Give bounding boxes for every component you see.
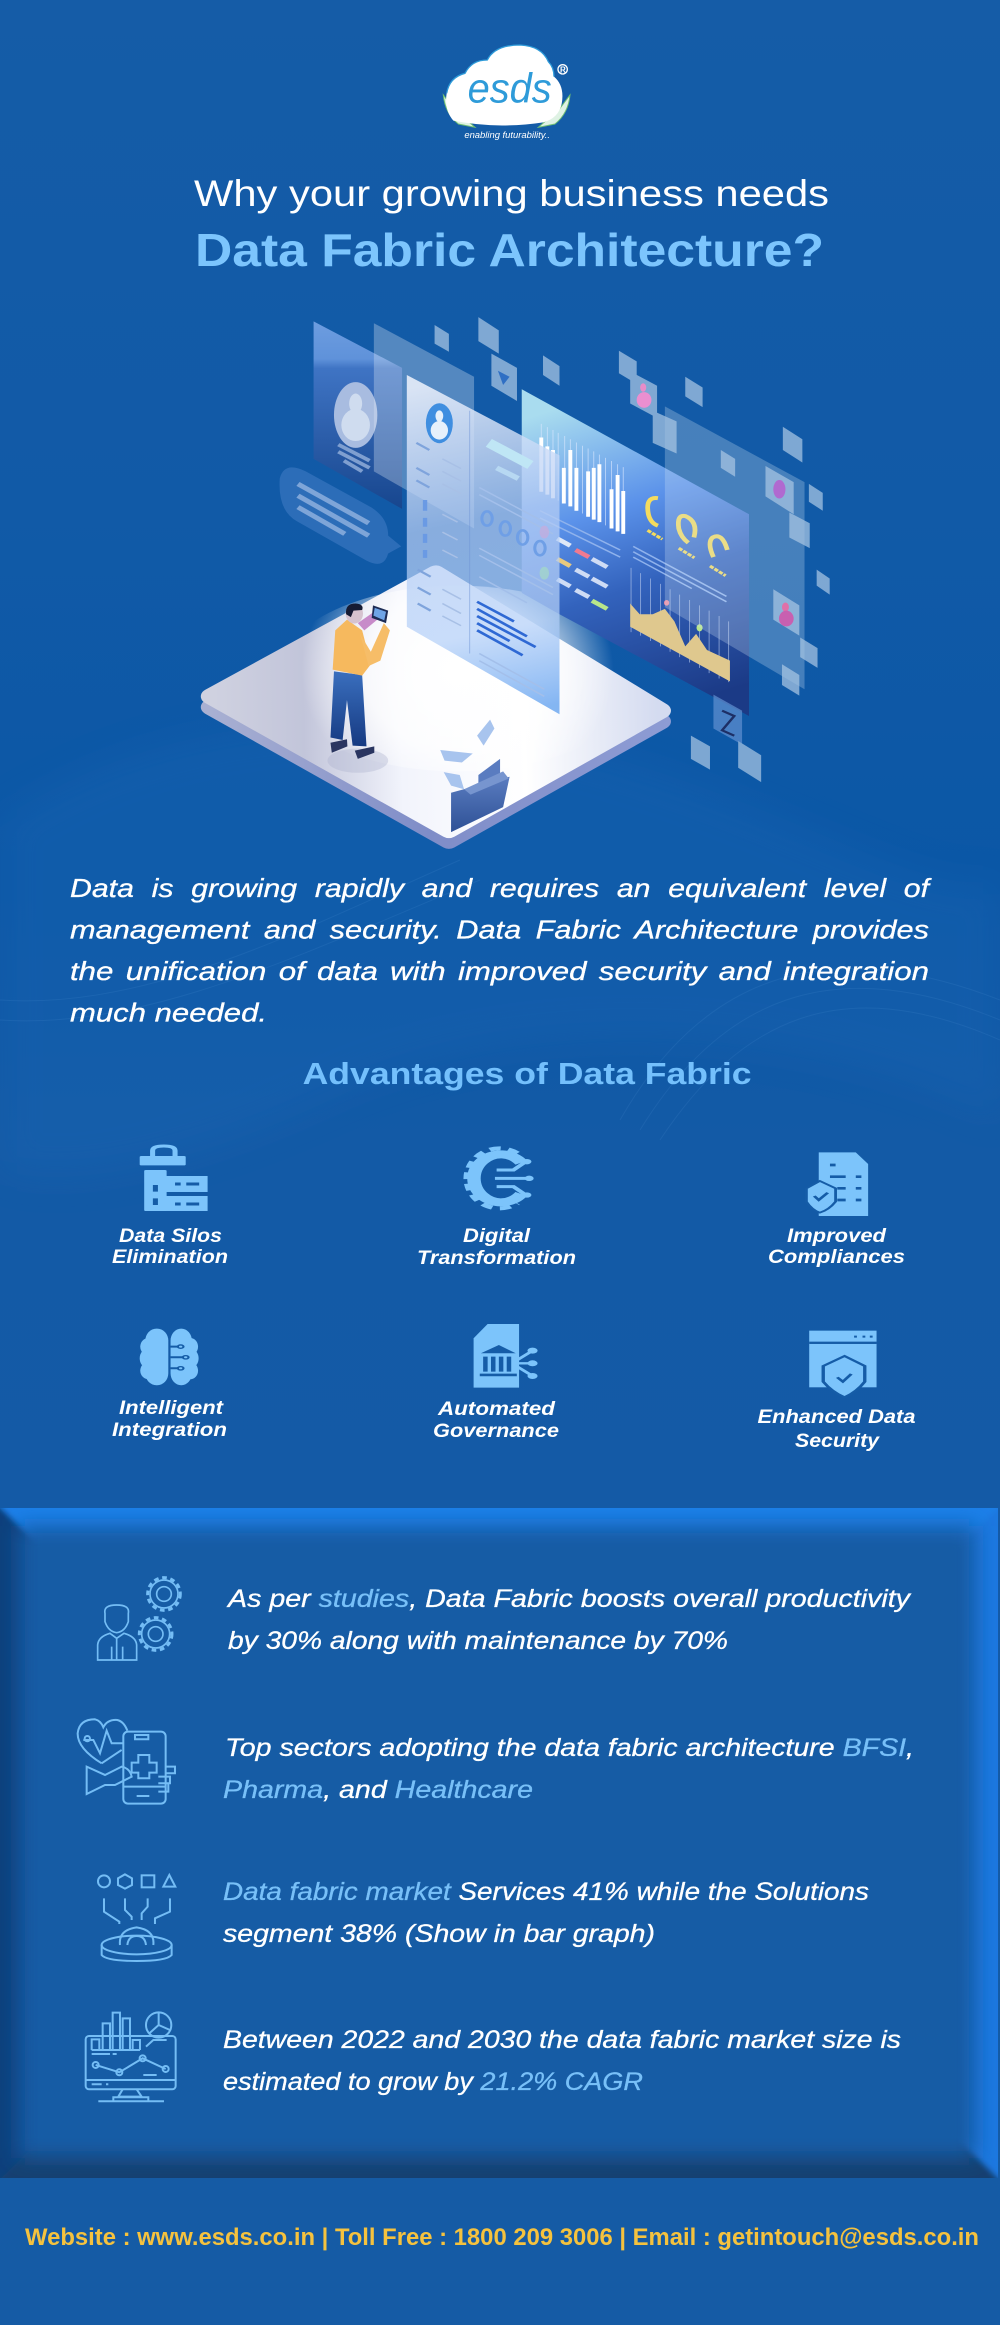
title xyxy=(194,173,829,276)
advantage labels: Governance xyxy=(433,1420,559,1442)
text: by 30% along with maintenance by 70% xyxy=(228,1627,728,1655)
advantage labels: Integration xyxy=(112,1419,227,1441)
text: Between 2022 and 2030 the data fabric market size is xyxy=(223,2026,901,2054)
intro paragraph: much needed. xyxy=(70,998,267,1028)
illustration: isometric data dashboard xyxy=(210,317,830,841)
icon: automated governance xyxy=(474,1324,538,1388)
list panel xyxy=(407,375,559,714)
text xyxy=(223,1734,914,1804)
icon: shapes and gear platform xyxy=(98,1874,175,1961)
advantage labels: Digital xyxy=(463,1225,531,1247)
translucent panel behind list xyxy=(374,323,474,529)
translucent right panel xyxy=(665,406,805,689)
text xyxy=(223,1878,869,1948)
text: Top sectors adopting the data fabric architecture BFSI , xyxy=(225,1734,914,1762)
area chart xyxy=(630,568,730,682)
floating squares xyxy=(435,317,830,782)
intro paragraph: the unification of data with improved security and integration xyxy=(70,956,929,986)
advantage labels: Compliances xyxy=(768,1246,905,1268)
status pills and text lines xyxy=(540,511,726,609)
icon: data silos xyxy=(140,1146,208,1211)
icon: digital transformation xyxy=(467,1148,534,1208)
logo: esds cloud: R xyxy=(560,65,566,74)
text: segment 38% (Show in bar graph) xyxy=(223,1920,655,1948)
intro paragraph: management and security. Data Fabric Architecture provides xyxy=(70,914,929,944)
intro paragraph: Data is growing rapidly and requires an equivalent level of xyxy=(70,873,932,903)
folder and flying papers xyxy=(440,720,510,832)
chat bubble xyxy=(280,467,401,564)
advantage labels xyxy=(112,1225,916,1452)
profile panel xyxy=(314,321,402,509)
logo: esds cloud: esds xyxy=(468,66,552,112)
text xyxy=(226,1585,912,1655)
stat 4: growth xyxy=(86,2012,901,2101)
advantage icons xyxy=(140,1146,877,1397)
advantage labels: Data Silos xyxy=(119,1225,222,1247)
logo: esds cloud xyxy=(443,45,570,140)
icon: person with gears xyxy=(98,1578,180,1660)
text xyxy=(223,2026,901,2096)
advantage labels: Intelligent xyxy=(119,1397,225,1419)
panel: statistics xyxy=(0,1508,998,2178)
icon: healthcare phone xyxy=(78,1719,175,1804)
icon: improved compliances xyxy=(806,1152,868,1216)
text: Pharma , and Healthcare xyxy=(223,1776,533,1804)
donut gauges xyxy=(648,498,727,576)
text: As per studies , Data Fabric boosts overall productivity xyxy=(226,1585,912,1613)
stat 1: productivity xyxy=(98,1578,912,1660)
advantage labels: Security xyxy=(795,1430,880,1452)
stat 2: sectors xyxy=(78,1719,914,1804)
advantage labels: Automated xyxy=(437,1398,556,1420)
logo: esds cloud: enabling futurability.. xyxy=(464,130,550,140)
advantage labels: Transformation xyxy=(417,1247,576,1269)
intro paragraph xyxy=(70,873,932,1028)
icon: monitor with charts xyxy=(86,2012,176,2101)
title: Data Fabric Architecture? xyxy=(195,224,824,276)
text: estimated to grow by 21.2% CAGR xyxy=(223,2068,643,2096)
advantage labels: Improved xyxy=(787,1225,887,1247)
floating square icons xyxy=(498,371,794,736)
advantage labels: Elimination xyxy=(112,1246,228,1268)
footer contact line: Website : www.esds.co.in | Toll Free : 1800 209 3006 | Email : getintouch@esds.co.in xyxy=(25,2224,979,2251)
text: Data fabric market Services 41% while the Solutions xyxy=(223,1878,869,1906)
analytics dashboard panel xyxy=(522,389,749,716)
icon: enhanced data security xyxy=(809,1331,877,1397)
advantage labels: Enhanced Data xyxy=(758,1406,916,1428)
person with tablet xyxy=(330,604,390,759)
bar chart xyxy=(541,424,623,534)
icon: intelligent integration xyxy=(140,1329,199,1385)
platform xyxy=(210,573,661,841)
stat 3: market xyxy=(98,1874,869,1961)
heading: advantages: Advantages of Data Fabric xyxy=(303,1056,752,1091)
title: Why your growing business needs xyxy=(194,173,829,214)
